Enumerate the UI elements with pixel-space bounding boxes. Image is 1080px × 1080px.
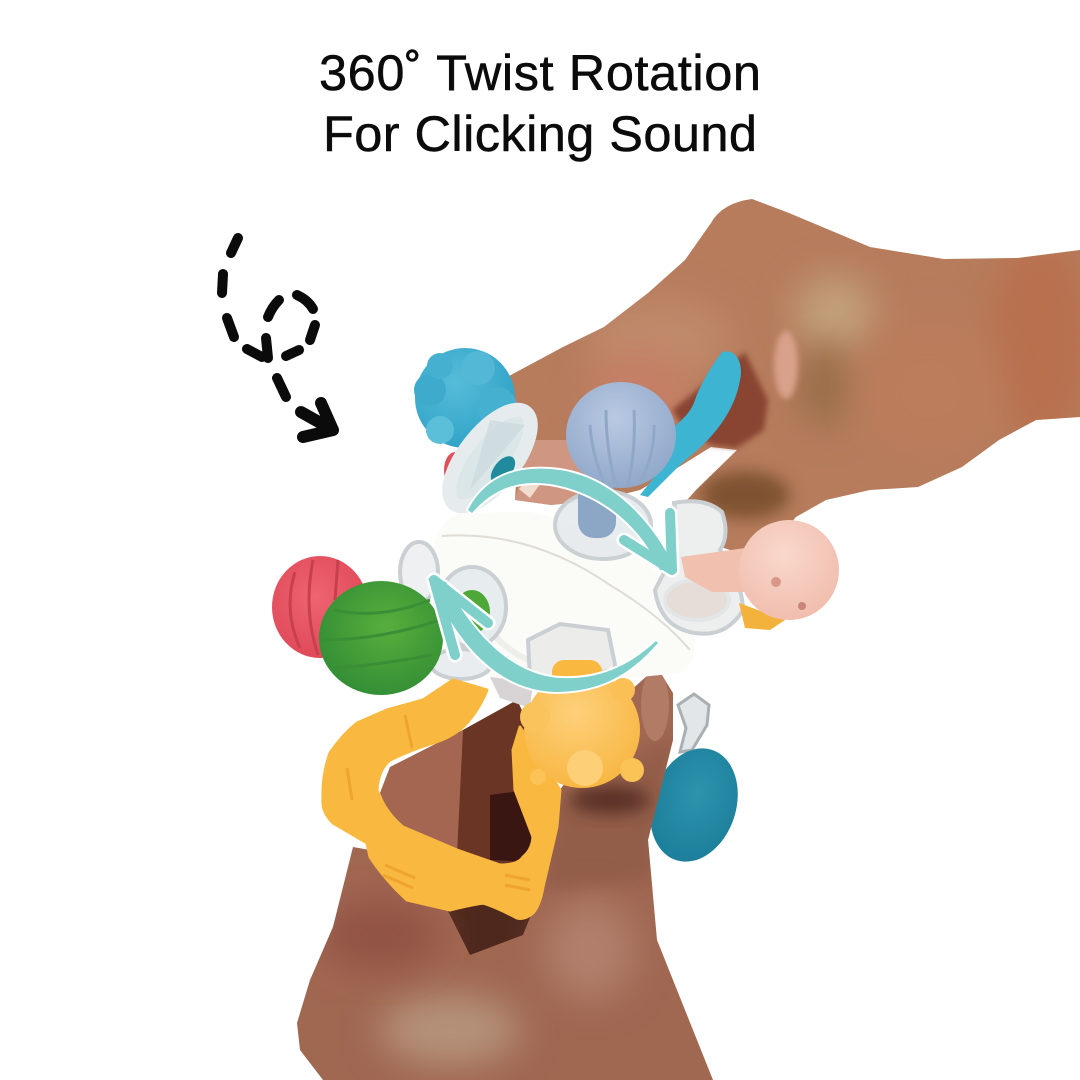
title <box>319 44 761 162</box>
dashed looping arrow <box>222 238 333 437</box>
grey ball <box>566 382 676 538</box>
red ball behind ring <box>444 452 466 488</box>
rotation arrows <box>428 469 676 692</box>
title: For Clicking Sound <box>323 105 757 162</box>
red ball <box>272 556 368 658</box>
blue teether handle <box>640 351 741 497</box>
right hand <box>507 199 1080 560</box>
dark gap inside hand <box>672 352 768 448</box>
peach ball <box>681 520 839 630</box>
blue textured ball <box>414 348 517 448</box>
bottom hand <box>297 667 713 1080</box>
yellow teether <box>323 680 560 918</box>
toy <box>272 348 839 918</box>
teal lower ball <box>636 694 752 873</box>
title: 360˚ Twist Rotation <box>319 44 761 101</box>
pale palm crease <box>774 331 798 399</box>
yellow knobbly ball <box>520 660 644 788</box>
lower arrow <box>428 578 658 692</box>
white centre body <box>434 512 695 685</box>
packaging label <box>490 677 533 708</box>
green ball <box>319 581 443 695</box>
clear rings <box>400 491 743 680</box>
green centre peg <box>454 590 490 634</box>
upper arrow <box>468 469 676 570</box>
clear ring upper left <box>435 397 545 519</box>
